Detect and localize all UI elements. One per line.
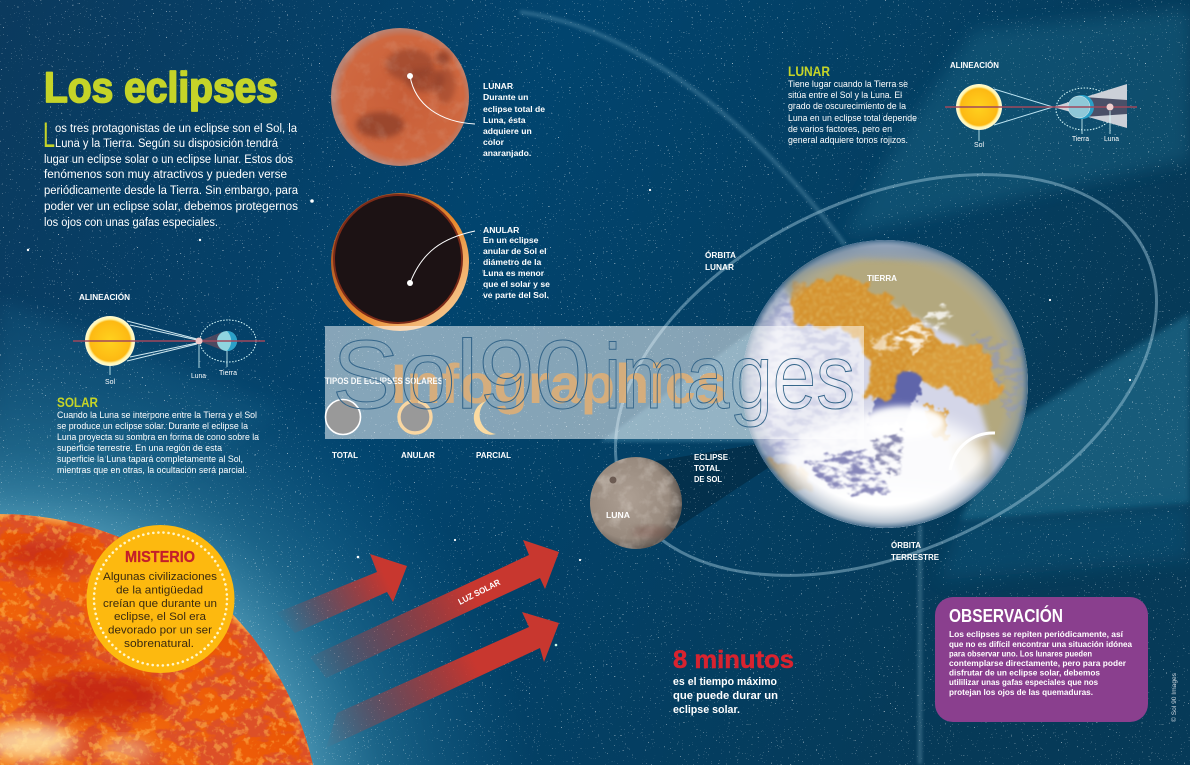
label: lunar eclipse photo: [483, 81, 545, 158]
callout: misterio: [86, 525, 234, 673]
label: earth orbit: [891, 539, 939, 562]
intro paragraph: periódicamente desde la Tierra. Sin embargo, para: [44, 183, 298, 197]
intro paragraph: Luna y la Tierra. Según su disposición tendrá: [55, 136, 278, 150]
moon: [590, 457, 682, 549]
label: lunar orbit: [705, 249, 736, 272]
watermark band: Sol90: [332, 320, 591, 429]
label: lunar eclipse photo: anaranjado.: [483, 148, 531, 158]
text block: solar eclipse: [57, 394, 259, 475]
text block: lunar eclipse: [788, 63, 917, 145]
diagram: lunar eclipse alignment: Luna: [1104, 134, 1120, 143]
earth: [740, 238, 1030, 530]
text block: lunar eclipse: de varios factores, pero en: [788, 124, 892, 134]
text block: lunar eclipse: sitúa entre el Sol y la Luna. El: [788, 90, 902, 100]
label: earth: TIERRA: [867, 273, 897, 283]
label: annular eclipse photo: En un eclipse: [483, 235, 539, 245]
diagram: solar eclipse alignment: Luna: [191, 371, 207, 380]
text block: solar eclipse: superficie la Luna tapará completamente al Sol,: [57, 454, 243, 464]
text block: solar eclipse: superficie terrestre. En una región de esta: [57, 443, 222, 453]
callout: misterio: eclipse, el Sol era: [114, 611, 207, 623]
intro paragraph: L: [43, 116, 55, 155]
text block: lunar eclipse: Luna en un eclipse total depende: [788, 113, 917, 123]
text block: lunar eclipse: grado de oscurecimiento de la: [788, 101, 906, 111]
diagram: lunar eclipse alignment: Sol: [974, 140, 984, 149]
callout: misterio: Algunas civilizaciones: [103, 571, 217, 583]
diagram: solar eclipse alignment: Sol: [105, 377, 115, 386]
eclipse type labels: [332, 450, 511, 460]
diagram: solar eclipse alignment: [73, 291, 265, 386]
intro paragraph: os tres protagonistas de un eclipse son el Sol, la: [55, 121, 297, 135]
text block: solar eclipse: SOLAR: [57, 394, 98, 410]
eclipse type labels: PARCIAL: [476, 450, 511, 460]
diagram: lunar eclipse alignment: ALINEACIÓN: [950, 59, 999, 70]
fact: 8 minutos: que puede durar un: [673, 690, 778, 702]
eclipse type labels: ANULAR: [401, 450, 436, 460]
label: earth orbit: TERRESTRE: [891, 552, 939, 562]
watermark band: Infographics: [391, 352, 727, 415]
diagram: lunar eclipse alignment: Tierra: [1072, 134, 1090, 143]
panel: observación: utililizar unas gafas especiales que nos: [949, 677, 1098, 687]
callout: misterio: de la antigüedad: [116, 584, 203, 596]
text block: solar eclipse: Luna proyecta su sombra en forma de cono sobre la: [57, 432, 259, 442]
panel: observación: Los eclipses se repiten periódicamente, así: [949, 629, 1124, 639]
text block: lunar eclipse: Tiene lugar cuando la Tierra se: [788, 79, 908, 89]
label: annular eclipse photo: que el solar y se: [483, 279, 550, 289]
watermark band: images: [604, 326, 855, 428]
red lunar eclipse moon: [331, 28, 475, 166]
label: total solar eclipse: [694, 452, 728, 484]
label: earth orbit: ÓRBITA: [891, 539, 921, 550]
diagram: lunar eclipse alignment: [945, 59, 1137, 149]
label: lunar eclipse photo: Durante un: [483, 92, 528, 102]
intro paragraph: lugar un eclipse solar o un eclipse lunar. Estos dos: [44, 152, 293, 166]
fact: 8 minutos: eclipse solar.: [673, 704, 740, 716]
arrow: sunlight bottom: [326, 612, 559, 748]
callout: misterio: devorado por un ser: [108, 624, 212, 636]
panel: observación: para observar uno. Los lunares pueden: [949, 648, 1092, 658]
órbita lunar: [552, 94, 1190, 656]
panel: observación: disfrutar de un eclipse solar, debemos: [949, 668, 1100, 678]
credit: © Sol 90 Images: [1170, 672, 1178, 722]
watermark band: TIPOS DE ECLIPSES SOLARES: [325, 376, 443, 387]
label: annular eclipse photo: diámetro de la: [483, 257, 541, 267]
text block: solar eclipse: se produce un eclipse solar. Durante el eclipse la: [57, 421, 248, 431]
text block: solar eclipse: Cuando la Luna se interpone entre la Tierra y el Sol: [57, 410, 257, 420]
label: lunar orbit: LUNAR: [705, 262, 735, 272]
panel: observación: OBSERVACIÓN: [949, 605, 1063, 626]
label: annular eclipse photo: [483, 225, 550, 300]
callout: misterio: creían que durante un: [103, 598, 217, 610]
text block: lunar eclipse: LUNAR: [788, 63, 830, 79]
intro paragraph: fenómenos son muy atractivos y pueden verse: [44, 167, 287, 181]
intro paragraph: los ojos con unas gafas especiales.: [44, 215, 218, 229]
label: lunar orbit: ÓRBITA: [705, 249, 736, 260]
title: Los eclipses: [44, 64, 278, 112]
text block: lunar eclipse: general adquiere tonos rojizos.: [788, 135, 908, 145]
callout: misterio: MISTERIO: [125, 549, 195, 566]
callout: misterio: sobrenatural.: [124, 638, 194, 650]
label: annular eclipse photo: ve parte del Sol.: [483, 290, 549, 300]
watermark band: [325, 320, 864, 439]
annular eclipse disc: [331, 193, 475, 331]
label: total solar eclipse: TOTAL: [694, 463, 720, 473]
arrow: sunlight middle with label: LUZ SOLAR: [456, 577, 503, 607]
sun (large, bottom left): [0, 505, 330, 765]
intro paragraph: poder ver un eclipse solar, debemos protegernos: [44, 199, 298, 213]
fact: 8 minutos: es el tiempo máximo: [673, 676, 777, 688]
diagram: solar eclipse alignment: Tierra: [219, 368, 238, 377]
eclipse type icons: [326, 400, 496, 435]
label: lunar eclipse photo: eclipse total de: [483, 104, 545, 114]
arrow: sunlight top: [276, 554, 407, 633]
panel: observación: protejan los ojos de las quemaduras.: [949, 687, 1093, 697]
panel: observación: contemplarse directamente, pero para poder: [949, 658, 1127, 668]
label: total solar eclipse: DE SOL: [694, 474, 722, 484]
label: total solar eclipse: ECLIPSE: [694, 452, 728, 462]
label: lunar eclipse photo: Luna, ésta: [483, 115, 526, 125]
órbita terrestre: [520, 12, 920, 764]
intro paragraph: [43, 116, 298, 229]
label: annular eclipse photo: Luna es menor: [483, 268, 545, 278]
fact: 8 minutos: 8 minutos: [673, 646, 794, 674]
label: lunar eclipse photo: LUNAR: [483, 81, 514, 91]
eclipse type labels: TOTAL: [332, 450, 358, 460]
label: annular eclipse photo: ANULAR: [483, 225, 520, 235]
fact: 8 minutos: [673, 646, 794, 716]
label: lunar eclipse photo: color: [483, 137, 505, 147]
label: annular eclipse photo: anular de Sol el: [483, 246, 547, 256]
label: lunar eclipse photo: adquiere un: [483, 126, 532, 136]
text block: solar eclipse: mientras que en otras, la ocultación será parcial.: [57, 465, 247, 475]
panel: observación: [935, 597, 1148, 722]
panel: observación: que no es difícil encontrar una situación idónea: [949, 639, 1132, 649]
diagram: solar eclipse alignment: ALINEACIÓN: [79, 291, 130, 302]
moon: LUNA: [606, 510, 630, 520]
clouds: [775, 406, 990, 530]
arrow: sunlight middle with label: [310, 540, 559, 678]
